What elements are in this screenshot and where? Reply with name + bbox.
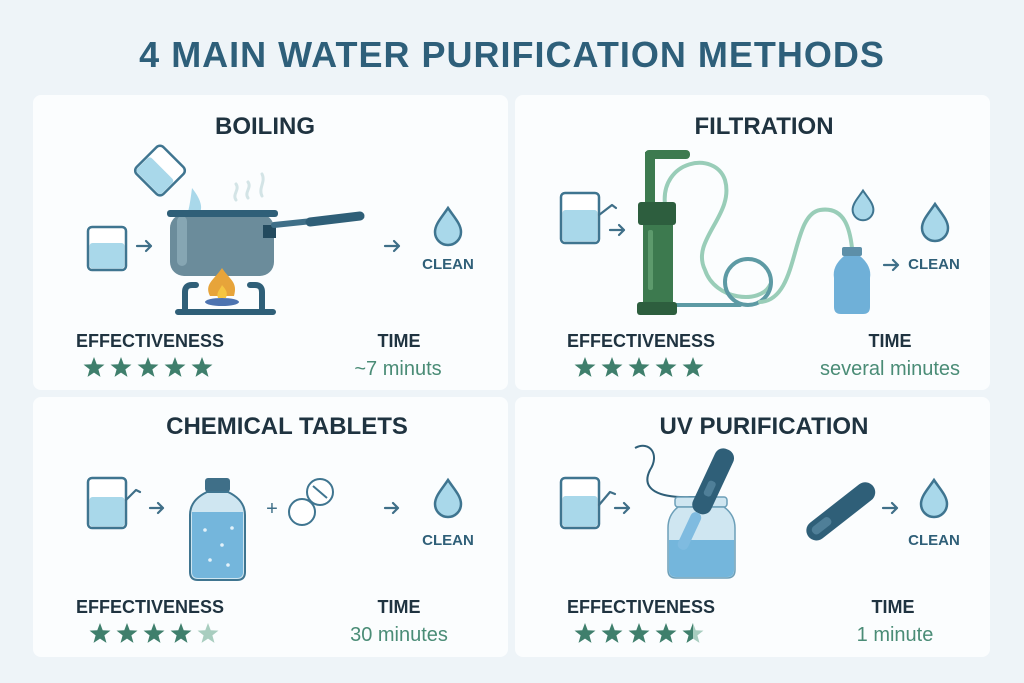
- arrow: [137, 241, 151, 251]
- icon: drop: [435, 208, 461, 245]
- heading: filtration: FILTRATION: [694, 113, 834, 140]
- label: clean: CLEAN: [908, 532, 960, 549]
- label: effectiveness: EFFECTIVENESS: [567, 331, 715, 351]
- rating stars: [84, 357, 212, 377]
- panel: uv purification: 1 minute: [857, 624, 933, 646]
- label: clean: CLEAN: [422, 256, 474, 273]
- label: effectiveness: EFFECTIVENESS: [76, 597, 224, 617]
- time: TIME: [872, 597, 914, 617]
- heading: chemical tablets: CHEMICAL TABLETS: [166, 413, 408, 440]
- arrow: [385, 241, 399, 251]
- heading: boiling: BOILING: [215, 113, 315, 140]
- icon: drop: [435, 480, 461, 517]
- time: TIME: [378, 597, 420, 617]
- icon: drops: [853, 191, 873, 220]
- plus sign: +: [266, 498, 278, 520]
- icon: cup: [561, 193, 616, 243]
- heading: uv purification: UV PURIFICATION: [660, 413, 868, 440]
- arrow: [884, 260, 898, 270]
- icon: tablets: [289, 479, 333, 525]
- icon: glass: [88, 227, 126, 270]
- label: effectiveness: EFFECTIVENESS: [76, 331, 224, 351]
- rating stars: [575, 623, 703, 643]
- time: TIME: [378, 331, 420, 351]
- icon: cord: [635, 446, 705, 497]
- time: TIME: [868, 331, 912, 351]
- panel: boiling: [33, 95, 508, 390]
- panel: chemical tablets: 30 minutes: [350, 624, 448, 646]
- arrow: [610, 225, 624, 235]
- label: clean: CLEAN: [908, 256, 960, 273]
- panel: filtration: several minutes: [820, 358, 960, 380]
- panel: boiling: ~7 minuts: [354, 358, 442, 380]
- icon: jar: [668, 497, 735, 578]
- arrow: [385, 503, 398, 513]
- icon: flame and burner: [178, 268, 273, 312]
- icon: hose: [665, 163, 852, 305]
- icon: uv pen in jar: [672, 445, 737, 554]
- label: effectiveness: EFFECTIVENESS: [567, 597, 715, 617]
- panel: uv purification: [515, 397, 990, 657]
- icon: bottle: [190, 478, 245, 580]
- arrow: [883, 503, 897, 513]
- icon: drop: [921, 480, 947, 517]
- rating stars: [90, 623, 218, 643]
- panel: filtration: [515, 95, 990, 390]
- icon: cup: [88, 478, 140, 528]
- panel: chemical tablets: [33, 397, 508, 657]
- title: 4 MAIN WATER PURIFICATION METHODS: [139, 34, 885, 75]
- icon: cup: [561, 478, 615, 528]
- arrow: [615, 503, 629, 513]
- icon: pump: [637, 150, 690, 315]
- arrow: [150, 503, 163, 513]
- icon: pot: [167, 210, 360, 276]
- icon: pitcher: [133, 144, 187, 197]
- icon: steam: [235, 174, 263, 200]
- label: clean: CLEAN: [422, 532, 474, 549]
- rating stars: [575, 357, 703, 377]
- icon: uv pen: [802, 478, 879, 545]
- icon: bottle: [834, 247, 870, 314]
